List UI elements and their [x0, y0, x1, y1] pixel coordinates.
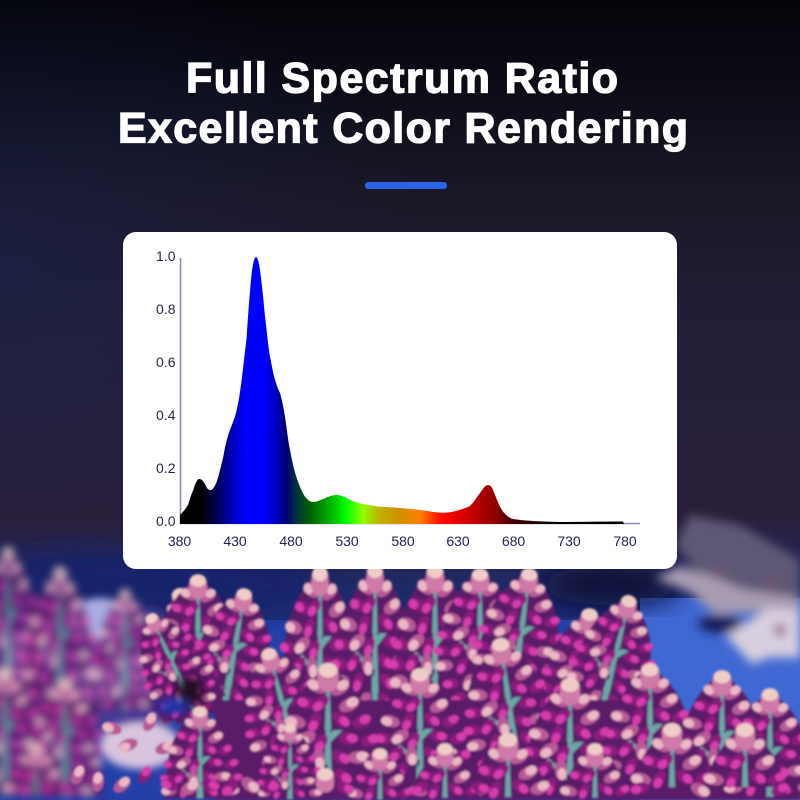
x axis labels: 380: [168, 533, 191, 549]
y axis labels: 0.0: [156, 513, 176, 529]
x axis labels: 680: [502, 533, 525, 549]
chart card: [123, 232, 677, 569]
x axis labels: 780: [613, 533, 637, 549]
x axis labels: [168, 533, 637, 549]
blurred background coral, right: [655, 515, 800, 664]
axes: [180, 258, 640, 524]
title: Excellent Color Rendering: [118, 104, 688, 152]
x axis labels: 430: [223, 533, 247, 549]
x axis labels: 530: [335, 533, 359, 549]
y axis labels: 0.6: [156, 354, 176, 370]
x axis labels: 480: [279, 533, 303, 549]
blurred background coral, left: [0, 546, 220, 798]
ocean floor glow: [0, 553, 800, 800]
foreground coral branches: [68, 562, 800, 800]
y axis labels: 1.0: [156, 248, 176, 264]
spectrum curve: [180, 257, 624, 524]
title: [118, 54, 688, 152]
title: Full Spectrum Ratio: [186, 54, 618, 102]
y axis labels: 0.2: [156, 460, 176, 476]
y axis labels: 0.4: [156, 407, 176, 423]
x axis labels: 630: [446, 533, 470, 549]
x axis labels: 730: [557, 533, 581, 549]
accent bar: [365, 182, 447, 189]
y axis labels: 0.8: [156, 301, 176, 317]
x axis labels: 580: [391, 533, 415, 549]
y axis labels: [156, 248, 176, 529]
